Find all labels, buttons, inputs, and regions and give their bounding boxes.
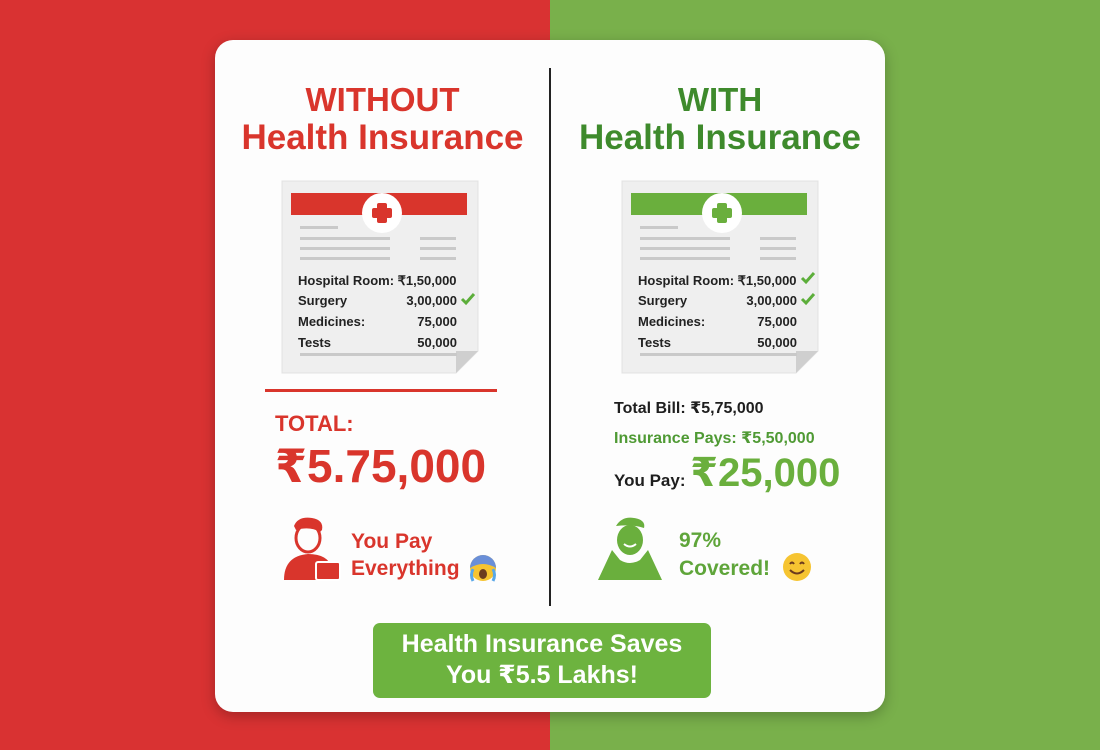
- totals right: Insurance Pays: ₹5,50,000: [614, 430, 815, 447]
- bill document: left: 50,000: [417, 335, 457, 350]
- total left: TOTAL:: [275, 411, 354, 436]
- heading: without: [241, 81, 524, 157]
- icon: stressed person with wallet: [284, 518, 339, 580]
- heading: with: WITH: [678, 81, 762, 118]
- bill document: left: 3,00,000: [406, 293, 457, 308]
- background red: [0, 0, 550, 750]
- bill document: left: Surgery: [298, 293, 348, 308]
- bill document: left: Hospital Room: ₹1,50,000: [298, 273, 457, 288]
- savings banner: [373, 623, 711, 698]
- totals right: You Pay: ₹25,000: [614, 451, 840, 495]
- icon: happy person: [598, 518, 662, 580]
- bill document: right: Hospital Room: ₹1,50,000: [638, 273, 797, 288]
- background green: [550, 0, 1100, 750]
- covered text: 97%: [679, 529, 721, 552]
- emoji: smiling face: [783, 553, 811, 581]
- bill document: left: 75,000: [417, 314, 457, 329]
- bill document: left: Medicines:: [298, 314, 365, 329]
- red rule: [265, 389, 497, 392]
- totals right: [614, 400, 840, 495]
- emoji: crying face: [470, 555, 496, 582]
- divider: [549, 68, 551, 606]
- savings banner: You ₹5.5 Lakhs!: [446, 661, 638, 689]
- bill document: right: Medicines:: [638, 314, 705, 329]
- covered text: [679, 529, 770, 580]
- bill document: right: 3,00,000: [746, 293, 797, 308]
- heading: without: Health Insurance: [241, 118, 524, 157]
- bill document: left: [282, 180, 478, 374]
- heading: with: [579, 81, 861, 157]
- bill document: right: Tests: [638, 335, 671, 350]
- total left: ₹5.75,000: [275, 440, 486, 492]
- bill document: left: Tests: [298, 335, 331, 350]
- covered text: Covered!: [679, 557, 770, 580]
- heading: with: Health Insurance: [579, 118, 861, 157]
- you pay everything text: [351, 530, 460, 580]
- you pay everything text: Everything: [351, 557, 460, 580]
- bill document: right: 75,000: [757, 314, 797, 329]
- totals right: Total Bill: ₹5,75,000: [614, 400, 764, 417]
- savings banner: Health Insurance Saves: [402, 630, 682, 658]
- you pay everything text: You Pay: [351, 530, 432, 553]
- bill document: right: [622, 180, 818, 374]
- total left: [275, 411, 486, 492]
- heading: without: WITHOUT: [306, 81, 459, 118]
- bill document: right: Surgery: [638, 293, 688, 308]
- bill document: right: 50,000: [757, 335, 797, 350]
- card: [215, 40, 885, 712]
